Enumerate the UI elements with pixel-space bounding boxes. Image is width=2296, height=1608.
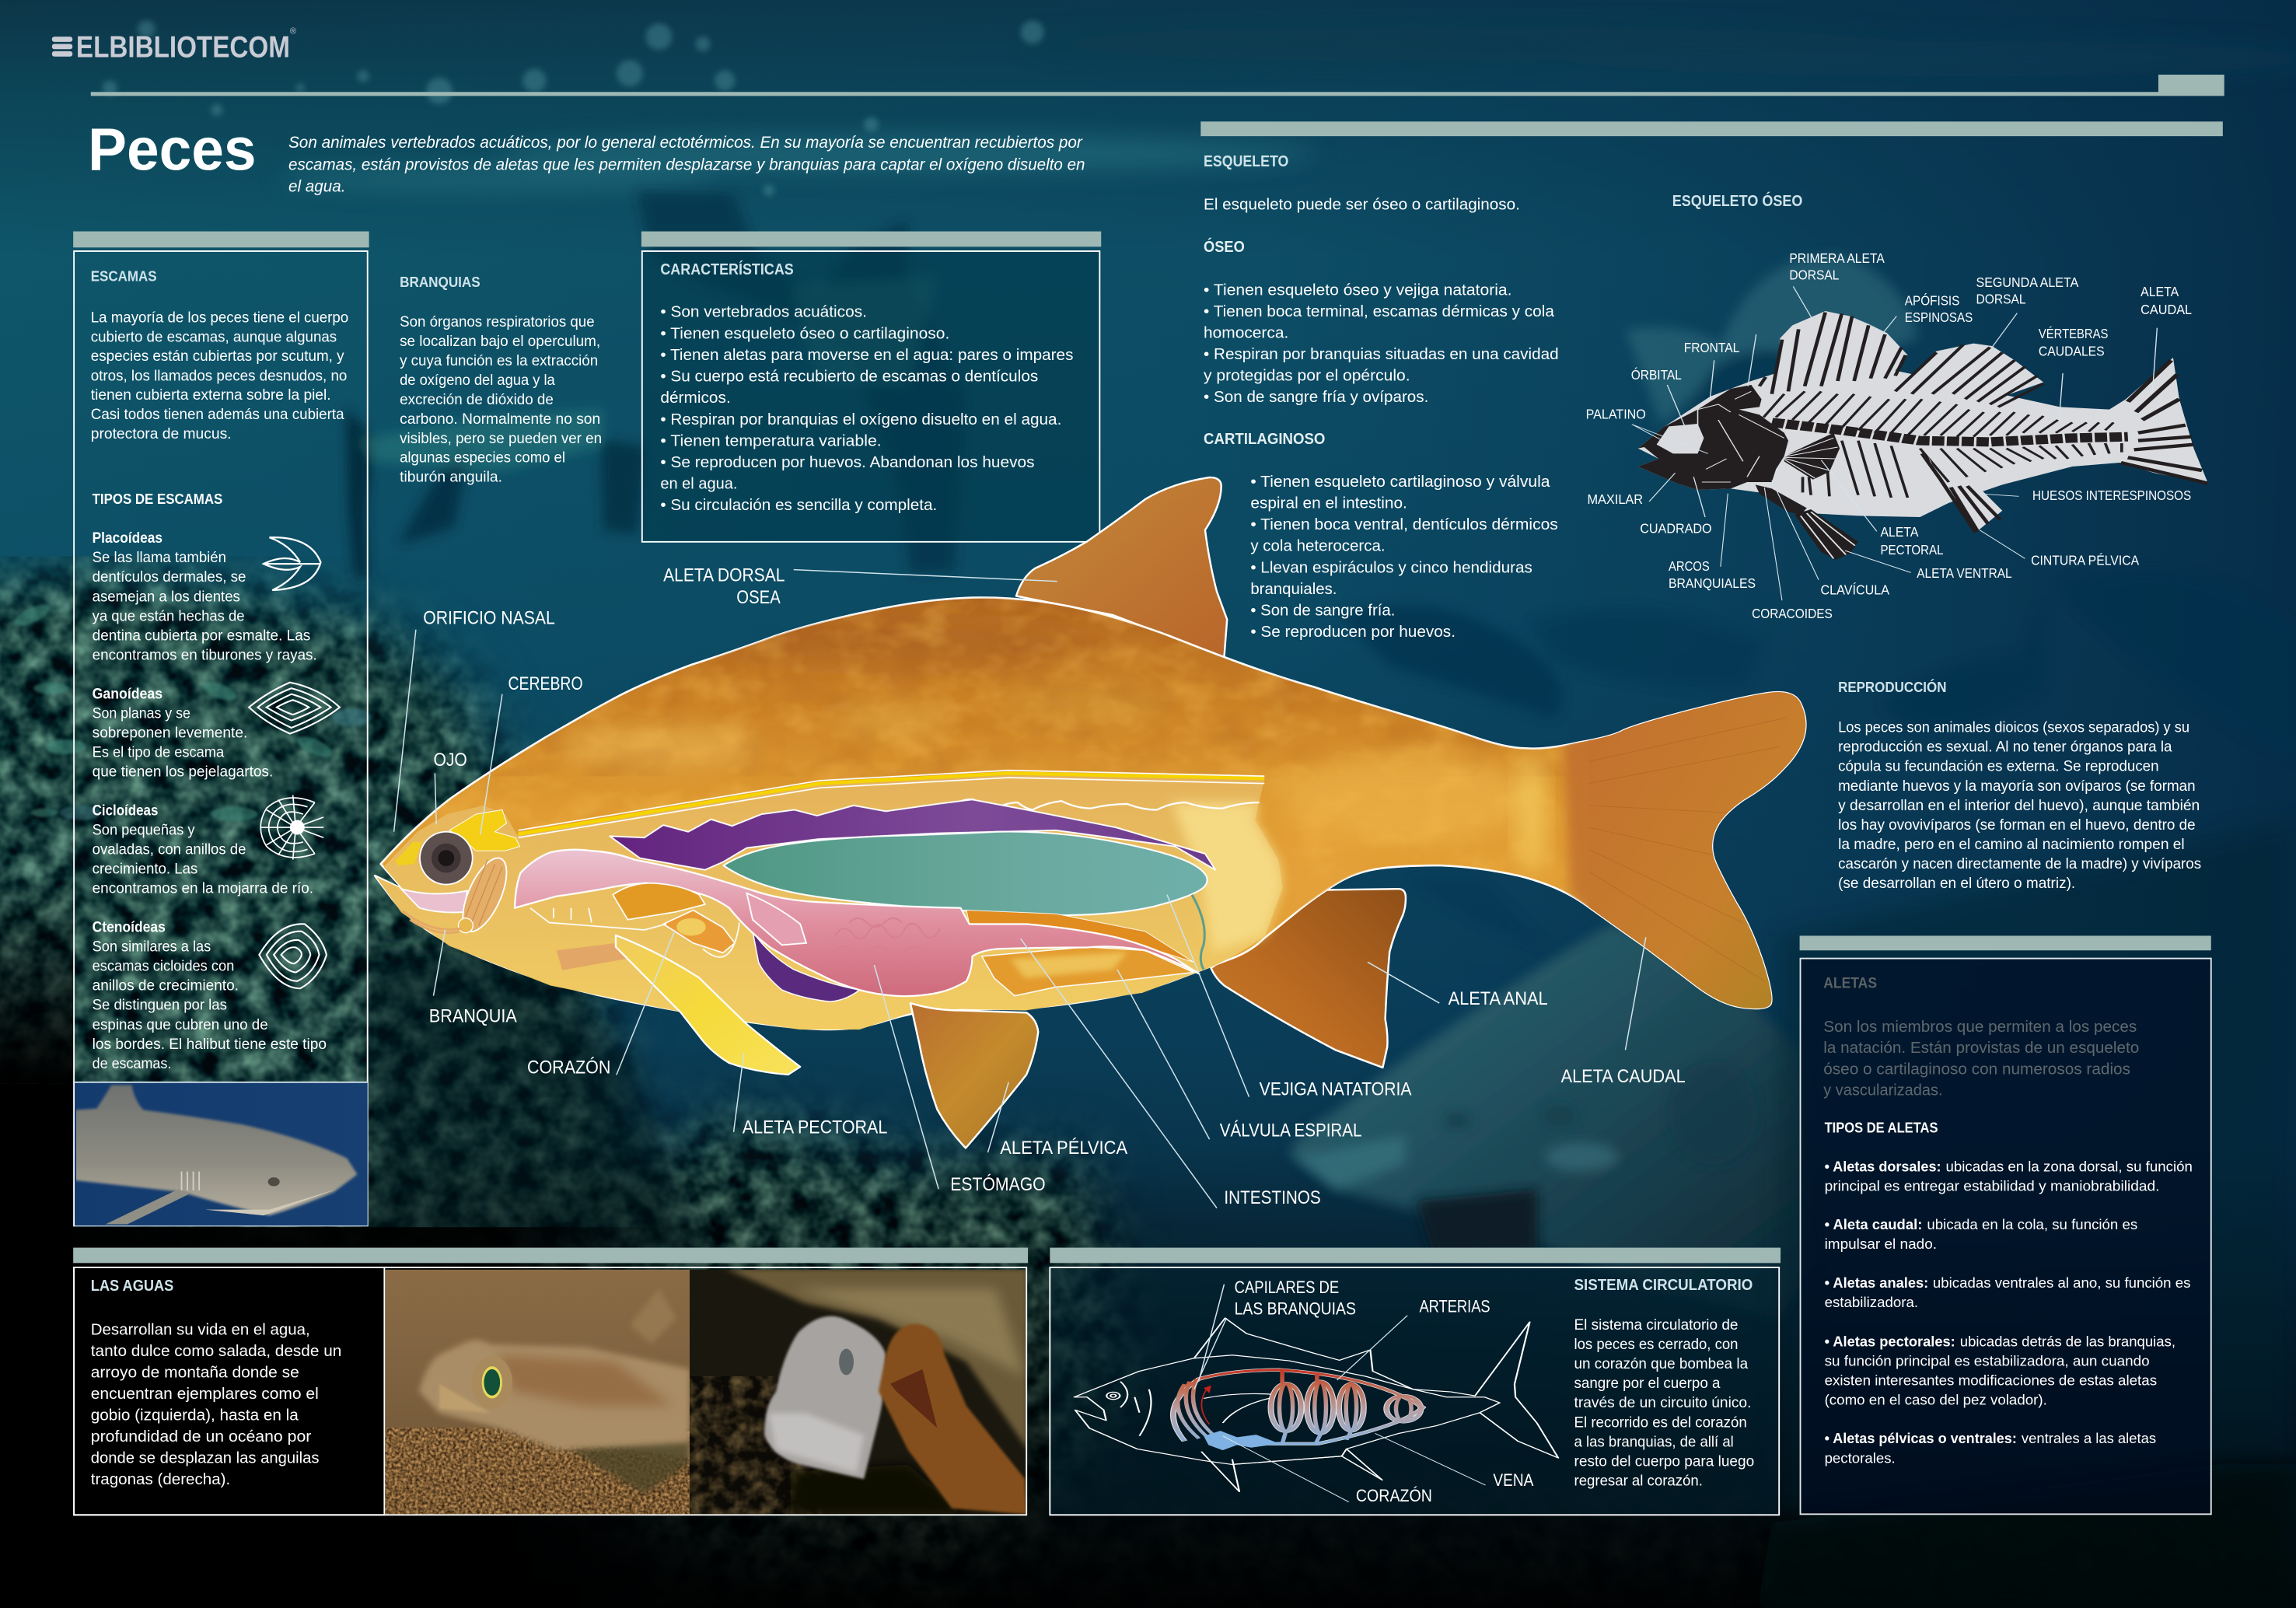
- organ: stomach and gut: [515, 850, 1199, 996]
- panel: características: • Su cuerpo está recubierto de escamas o dentículos: [660, 368, 1038, 386]
- icon: ctenoid scale: [259, 924, 327, 988]
- text: placoideas: encontramos en tiburones y rayas.: [93, 648, 317, 664]
- labels: skeleton: SEGUNDA ALETA: [1976, 274, 2079, 290]
- panel: esqueleto text: • Se reproducen por huevos.: [1250, 623, 1456, 641]
- text block: branquias: tiburón anguila.: [400, 470, 502, 486]
- panel: aletas: ventrales a las aletas: [2022, 1430, 2156, 1446]
- panel: esqueleto text: branquiales.: [1250, 580, 1337, 598]
- text block: reproducción: (se desarrollan en el útero o matriz).: [1838, 876, 2075, 892]
- labels: main fish: OSEA: [736, 588, 781, 608]
- labels: circulatory: CAPILARES DE: [1235, 1278, 1339, 1297]
- text: ctenoideas: espinas que cubren uno de: [93, 1017, 268, 1033]
- labels: main fish: [423, 566, 1686, 1208]
- icon: ganoid scale: [249, 683, 340, 734]
- labels: main fish: ALETA CAUDAL: [1561, 1067, 1686, 1087]
- text block: branquias: BRANQUIAS: [400, 274, 481, 290]
- panel: características: • Se reproducen por huevos. Abandonan los huevos: [660, 453, 1035, 471]
- labels: main fish: INTESTINOS: [1224, 1188, 1321, 1208]
- labels: skeleton: BRANQUIALES: [1669, 575, 1756, 591]
- panel: características: • Tienen aletas para moverse en el agua: pares o impares: [660, 346, 1073, 364]
- photo: moray eels: [690, 1268, 1028, 1515]
- text block: branquias: visibles, pero se pueden ver en: [400, 431, 602, 447]
- fin: anal: [1211, 889, 1406, 1068]
- labels: main fish: CORAZÓN: [527, 1057, 610, 1078]
- text: ctenoideas: anillos de crecimiento.: [93, 978, 239, 995]
- labels: main fish: ESTÓMAGO: [950, 1174, 1046, 1195]
- text: sistema circulatorio: los peces es cerrado, con: [1574, 1337, 1738, 1353]
- panel: las aguas: tragonas (derecha).: [91, 1470, 230, 1488]
- labels: skeleton: ÓRBITAL: [1631, 366, 1682, 383]
- labels: skeleton: CORACOIDES: [1752, 606, 1833, 621]
- text block: reproducción: la madre, pero en el camino al nacimiento rompen el: [1838, 837, 2185, 853]
- panel: aletas: ALETAS: [1823, 974, 1877, 991]
- panel: aletas: ubicada en la cola, su función es: [1927, 1216, 2137, 1232]
- organ: brain: [449, 809, 520, 851]
- text: cicloideas: Son pequeñas y: [93, 822, 195, 838]
- labels: skeleton: PECTORAL: [1881, 542, 1944, 558]
- panel: las aguas: tanto dulce como salada, desde un: [91, 1342, 341, 1360]
- text: placoideas: [93, 530, 317, 664]
- diagram: bony fish skeleton: [1632, 286, 2208, 600]
- panel: aletas: (como en el caso del pez volador).: [1825, 1391, 2047, 1407]
- organ: eye: [419, 831, 474, 885]
- panel: características: • Su circulación es sencilla y completa.: [660, 496, 937, 514]
- panel: las aguas: gobio (izquierda), hasta en la: [91, 1407, 299, 1424]
- organ zone: inner cavity: [376, 774, 1283, 1029]
- text: ctenoideas: escamas cicloides con: [93, 959, 234, 975]
- panel: esqueleto text: ÓSEO: [1204, 237, 1245, 256]
- intro text: escamas, están provistos de aletas que les permiten desplazarse y branquias para captar el oxígeno disuelto en: [288, 156, 1085, 173]
- text: cicloideas: ovaladas, con anillos de: [93, 842, 246, 858]
- text block: reproducción: [1838, 679, 2201, 892]
- text: cicloideas: crecimiento. Las: [93, 862, 197, 878]
- fin: pectoral: [557, 943, 628, 970]
- panel: aletas: ubicadas en la zona dorsal, su función: [1946, 1159, 2193, 1175]
- panel: esqueleto text: y protegidas por el opérculo.: [1204, 366, 1410, 384]
- text block: reproducción: cópula su fecundación es externa. Se reproducen: [1838, 759, 2159, 775]
- text: sistema circulatorio: un corazón que bombea la: [1574, 1356, 1748, 1372]
- labels: main fish: ALETA ANAL: [1449, 989, 1548, 1009]
- panel: esqueleto text: • Son de sangre fría.: [1250, 601, 1395, 619]
- panel: aletas: impulsar el nado.: [1825, 1236, 1937, 1252]
- text block: branquias: y cuya función es la extracción: [400, 353, 598, 369]
- panel: características: • Son vertebrados acuáticos.: [660, 303, 867, 321]
- panel: aletas: principal es entregar estabilidad y maniobrabilidad.: [1825, 1178, 2159, 1194]
- panel: características: • Respiran por branquias el oxígeno disuelto en el agua.: [660, 411, 1061, 428]
- text: ganoideas: sobreponen levemente.: [93, 725, 247, 741]
- body silhouette: [375, 597, 1805, 1029]
- organ: gill: [403, 852, 515, 938]
- text: ctenoideas: Son similares a las: [93, 939, 211, 956]
- panel: características: CARACTERÍSTICAS: [660, 260, 794, 278]
- labels: main fish: OJO: [433, 750, 467, 771]
- text: placoideas: Se las llama también: [93, 550, 226, 566]
- panel: características: dérmicos.: [660, 389, 731, 407]
- labels: skeleton: ALETA VENTRAL: [1917, 565, 2012, 581]
- labels: skeleton: DORSAL: [1976, 292, 2026, 307]
- panel: las aguas: donde se desplazan las anguilas: [91, 1449, 320, 1467]
- labels: main fish: ALETA PECTORAL: [743, 1118, 887, 1138]
- text: ctenoideas: Ctenoídeas: [93, 920, 166, 936]
- text: sistema circulatorio: [1574, 1277, 1754, 1489]
- text: sistema circulatorio: sangre por el cuerpo a: [1574, 1376, 1721, 1392]
- labels: skeleton: MAXILAR: [1587, 491, 1643, 507]
- labels: circulatory: CORAZÓN: [1356, 1486, 1432, 1505]
- panel: características: • Tienen esqueleto óseo o cartilaginoso.: [660, 324, 949, 342]
- labels: main fish: ALETA PÉLVICA: [1000, 1138, 1127, 1159]
- labels: main fish: ORIFICIO NASAL: [423, 608, 555, 628]
- text: sistema circulatorio: a las branquias, de allí al: [1574, 1434, 1734, 1450]
- panel: las aguas: [73, 1248, 1028, 1515]
- text: sistema circulatorio: regresar al corazón.: [1574, 1473, 1703, 1489]
- text block: branquias: excreción de dióxido de: [400, 392, 554, 408]
- labels: circulatory: VENA: [1493, 1470, 1534, 1490]
- intro text: el agua.: [288, 178, 345, 196]
- panel: esqueleto text: El esqueleto puede ser óseo o cartilaginoso.: [1204, 195, 1520, 213]
- labels: circulatory: LAS BRANQUIAS: [1235, 1299, 1356, 1318]
- labels: main fish: BRANQUIA: [429, 1007, 517, 1027]
- text: placoideas: dentina cubierta por esmalte. Las: [93, 628, 310, 645]
- panel: aletas: ubicadas detrás de las branquias,: [1960, 1333, 2175, 1349]
- logo: ELBIBLIOTECOM: [76, 30, 290, 64]
- text: sistema circulatorio: resto del cuerpo para luego: [1574, 1453, 1754, 1470]
- labels: circulatory: ARTERIAS: [1419, 1296, 1490, 1316]
- labels: skeleton: [1586, 250, 2192, 621]
- panel: esqueleto text: • Tienen boca ventral, dentículos dérmicos: [1250, 516, 1558, 533]
- panel: aletas: estabilizadora.: [1825, 1294, 1918, 1310]
- text: sistema circulatorio: El sistema circulatorio de: [1574, 1317, 1738, 1334]
- text block: reproducción: cascarón y nacen directamente de la madre) y vivíparos: [1838, 856, 2201, 872]
- text: ganoideas: que tienen los pejelagartos.: [93, 764, 273, 781]
- panel: esqueleto text: [1200, 121, 2223, 641]
- text block: branquias: [400, 274, 602, 486]
- title: Peces: [88, 116, 257, 183]
- text block: reproducción: mediante huevos y la mayoría son ovíparos (se forman: [1838, 778, 2196, 795]
- panel: aletas: • Aletas dorsales:: [1825, 1159, 1941, 1175]
- text block: branquias: algunas especies como el: [400, 450, 565, 467]
- labels: skeleton: ESPINOSAS: [1905, 309, 1973, 325]
- labels: skeleton: PALATINO: [1586, 407, 1646, 422]
- top rule: [91, 75, 2224, 96]
- text: ganoideas: Ganoídeas: [93, 686, 163, 702]
- text block: reproducción: reproducción es sexual. Al no tener órganos para la: [1838, 739, 2172, 756]
- organ: mouth cavity: [401, 889, 467, 912]
- panel: aletas: ubicadas ventrales al ano, su función es: [1933, 1274, 2190, 1291]
- labels: skeleton: ALETA: [2140, 284, 2179, 299]
- labels: main fish: VEJIGA NATATORIA: [1260, 1080, 1412, 1100]
- panel: esqueleto text: • Tienen esqueleto óseo y vejiga natatoria.: [1204, 281, 1511, 299]
- text: ctenoideas: Se distinguen por las: [93, 998, 227, 1014]
- panel: las aguas: arroyo de montaña donde se: [91, 1364, 299, 1382]
- text block: branquias: se localizan bajo el operculum,: [400, 334, 600, 350]
- text: escamas intro: Casi todos tienen además una cubierta: [91, 407, 344, 423]
- text: cicloideas: Cicloídeas: [93, 802, 158, 819]
- labels: skeleton: ALETA: [1881, 524, 1919, 540]
- labels: main fish leader lines: [394, 570, 1646, 1208]
- swim duct: [1192, 895, 1204, 970]
- panel: aletas: [1800, 935, 2211, 1514]
- text: escamas intro: especies están cubiertas por scutum, y: [91, 348, 344, 365]
- organ: heart: [530, 883, 739, 957]
- photo: goby: [385, 1268, 690, 1515]
- fin: pelvic: [910, 1003, 1038, 1148]
- icon: placoid scale: [264, 537, 320, 590]
- text: escamas intro: otros, los llamados peces desnudos, no: [91, 368, 347, 384]
- organ: intestine lower orange: [982, 947, 1193, 996]
- wavy vertebral line: [952, 799, 1260, 809]
- text block: reproducción: Los peces son animales dioicos (sexos separados) y su: [1838, 720, 2189, 736]
- logo: ®: [290, 26, 297, 36]
- icon: cycloid scale: [260, 795, 323, 859]
- labels: main fish: ALETA DORSAL: [663, 566, 785, 586]
- panel: esqueleto text: • Tienen boca terminal, escamas dérmicas y cola: [1204, 302, 1554, 320]
- panel: aletas: TIPOS DE ALETAS: [1825, 1120, 1938, 1136]
- labels: skeleton: FRONTAL: [1684, 340, 1739, 355]
- labels: skeleton: CLAVÍCULA: [1820, 582, 1889, 598]
- text: escamas intro: tienen cubierta externa sobre la piel.: [91, 387, 331, 404]
- photo: shark: [74, 1082, 368, 1225]
- labels: circulatory: [1235, 1278, 1534, 1505]
- panel: aletas: • Aletas pélvicas o ventrales:: [1825, 1430, 2017, 1446]
- panel: esqueleto text: • Llevan espiráculos y cinco hendiduras: [1250, 558, 1532, 576]
- intro text: [288, 134, 1085, 196]
- text: placoideas: asemejan a los dientes: [93, 589, 240, 605]
- labels: skeleton: CAUDALES: [2039, 344, 2105, 359]
- panel: esqueleto text: espiral en el intestino.: [1250, 495, 1407, 512]
- text block: branquias: Son órganos respiratorios que: [400, 314, 595, 330]
- labels: skeleton: HUESOS INTERESPINOSOS: [2032, 488, 2191, 503]
- panel: aletas: • Aletas pectorales:: [1825, 1333, 1955, 1349]
- labels: skeleton: CAUDAL: [2140, 302, 2192, 317]
- organ: lower purple: [753, 932, 859, 1002]
- panel: aletas: y vascularizadas.: [1823, 1082, 1943, 1099]
- diagram: circulatory fish: [1075, 1285, 1558, 1502]
- text block: branquias: carbono. Normalmente no son: [400, 411, 600, 428]
- text: cicloideas: encontramos en la mojarra de río.: [93, 881, 313, 897]
- text: ctenoideas: [93, 920, 327, 1072]
- text: sistema circulatorio: El recorrido es del corazón: [1574, 1414, 1747, 1431]
- text: ganoideas: Es el tipo de escama: [93, 744, 224, 760]
- text block: branquias: de oxígeno del agua y la: [400, 372, 555, 389]
- panel: características: en el agua.: [660, 474, 737, 492]
- intro text: Son animales vertebrados acuáticos, por lo general ectotérmicos. En su mayoría se encuentran recubiertos por: [288, 134, 1083, 152]
- labels: skeleton: PRIMERA ALETA: [1789, 250, 1885, 266]
- text: escamas intro: cubierto de escamas, aunque algunas: [91, 329, 337, 345]
- text block: reproducción: y desarrollan en el interior del huevo), aunque también: [1838, 798, 2200, 814]
- organ: liver upper: [966, 910, 1193, 962]
- panel: las aguas: LAS AGUAS: [91, 1278, 173, 1295]
- panel: aletas: existen interesantes modificaciones de estas aletas: [1825, 1372, 2157, 1388]
- panel: las aguas: Desarrollan su vida en el agua,: [91, 1321, 310, 1339]
- heading: esqueleto óseo: ESQUELETO ÓSEO: [1672, 191, 1802, 210]
- panel: aletas: • Aleta caudal:: [1825, 1216, 1922, 1232]
- organ: kidney purple: [610, 799, 1215, 870]
- labels: main fish: VÁLVULA ESPIRAL: [1220, 1120, 1361, 1141]
- panel: esqueleto text: CARTILAGINOSO: [1204, 430, 1325, 448]
- panel: esqueleto text: • Respiran por branquias situadas en una cavidad: [1204, 345, 1559, 363]
- text: ganoideas: Son planas y se: [93, 705, 190, 722]
- panel: aletas: óseo o cartilaginoso con numerosos radios: [1823, 1061, 2130, 1078]
- panel: esqueleto text: • Tienen esqueleto cartilaginoso y válvula: [1250, 473, 1550, 491]
- text: placoideas: ya que están hechas de: [93, 609, 245, 625]
- text: sistema circulatorio: SISTEMA CIRCULATORIO: [1574, 1277, 1753, 1294]
- panel: aletas: su función principal es estabilizadora, aun cuando: [1825, 1352, 2150, 1369]
- panel: esqueleto text: y cola heterocerca.: [1250, 537, 1386, 555]
- panel: esqueleto text: homocerca.: [1204, 323, 1288, 341]
- panel: las aguas: profundidad de un océano por: [91, 1428, 311, 1445]
- organ: swim bladder: [723, 832, 1207, 915]
- text: placoideas: Placoídeas: [93, 530, 163, 547]
- fin: dorsal: [1016, 477, 1227, 658]
- panel: características: [641, 232, 1101, 542]
- labels: skeleton: ARCOS: [1669, 558, 1710, 574]
- text: sistema circulatorio: través de un circuito único.: [1574, 1395, 1751, 1411]
- panel: las aguas: encuentran ejemplares como el: [91, 1385, 319, 1403]
- text: escamas intro: protectora de mucus.: [91, 426, 232, 442]
- text: ctenoideas: los bordes. El halibut tiene este tipo: [93, 1036, 327, 1053]
- panel: esqueleto text: • Son de sangre fría y ovíparos.: [1204, 388, 1428, 406]
- text block: reproducción: REPRODUCCIÓN: [1838, 679, 1946, 695]
- diagram: main fish anatomy: [375, 477, 1815, 1148]
- panel: aletas: pectorales.: [1825, 1449, 1896, 1466]
- text: ganoideas: [93, 686, 273, 781]
- panel: aletas: Son los miembros que permiten a los peces: [1823, 1019, 2137, 1036]
- labels: skeleton: APÓFISIS: [1905, 292, 1959, 308]
- panel: aletas: la natación. Están provistas de un esqueleto: [1823, 1040, 2139, 1057]
- labels: main fish: CEREBRO: [508, 674, 583, 694]
- text: escamas intro: [91, 309, 348, 442]
- panel: aletas: • Aletas anales:: [1825, 1274, 1928, 1291]
- text block: reproducción: los hay ovovivíparos (se forman en el huevo, dentro de: [1838, 817, 2196, 834]
- spinal cord: [519, 773, 1264, 834]
- labels: skeleton: CINTURA PÉLVICA: [2031, 552, 2139, 568]
- heading: tipos de escamas: TIPOS DE ESCAMAS: [93, 491, 222, 507]
- panel: escamas: [73, 232, 369, 1225]
- text: cicloideas: [93, 802, 313, 897]
- panel: características: • Tienen temperatura variable.: [660, 432, 882, 449]
- text: escamas intro: La mayoría de los peces tiene el cuerpo: [91, 309, 348, 326]
- panel: esqueleto text: ESQUELETO: [1204, 153, 1288, 170]
- heading: escamas: ESCAMAS: [91, 269, 157, 285]
- labels: skeleton: CUADRADO: [1640, 521, 1712, 537]
- panel: sistema circulatorio: [1050, 1248, 1781, 1515]
- text: ctenoideas: de escamas.: [93, 1056, 171, 1072]
- labels: skeleton: DORSAL: [1789, 267, 1840, 283]
- text: placoideas: dentículos dermales, se: [93, 569, 246, 586]
- labels: skeleton: VÉRTEBRAS: [2039, 326, 2108, 341]
